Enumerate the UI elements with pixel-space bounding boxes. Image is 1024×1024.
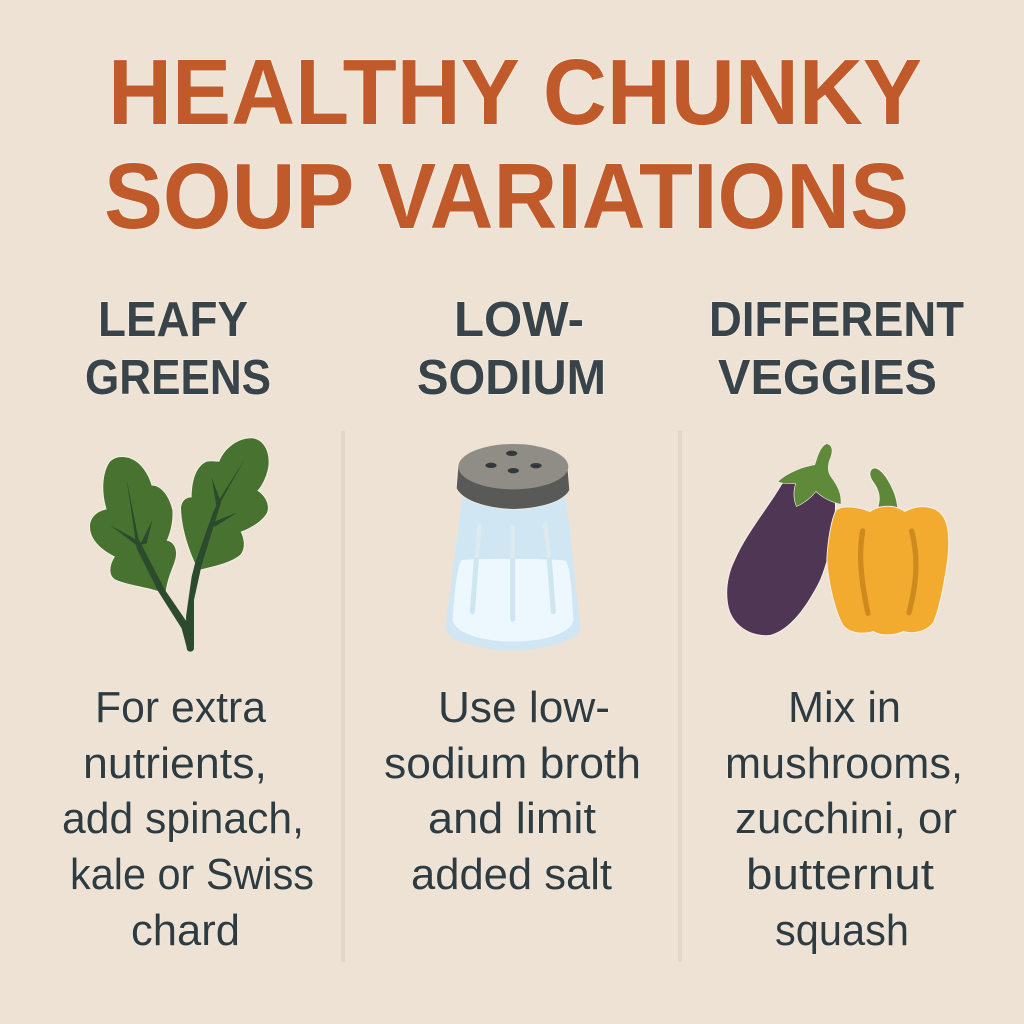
heading: leafy greens	[85, 293, 271, 405]
body text: low-sodium: sodium broth	[384, 740, 641, 788]
icon: leafy greens	[90, 438, 269, 652]
panel: low-sodium	[384, 293, 641, 899]
body text: leafy greens: nutrients,	[83, 740, 267, 788]
heading: different veggies	[709, 293, 964, 405]
body text: low-sodium	[384, 684, 641, 899]
heading: leafy greens: GREENS	[85, 351, 271, 405]
body text: leafy greens: chard	[131, 907, 240, 955]
body text: low-sodium: Use low-	[438, 684, 610, 732]
body text: different veggies	[725, 684, 963, 955]
body text: low-sodium: added salt	[411, 851, 612, 899]
body text: leafy greens: For extra	[95, 684, 267, 732]
heading: low-sodium: LOW-	[454, 293, 584, 347]
body text: low-sodium: and limit	[428, 795, 596, 843]
title: SOUP VARIATIONS	[104, 144, 909, 248]
body text: different veggies: zucchini, or	[735, 795, 957, 843]
body text: leafy greens: kale or Swiss	[70, 851, 314, 899]
body text: different veggies: squash	[775, 907, 909, 955]
body text: different veggies: butternut	[746, 851, 934, 899]
heading: different veggies: DIFFERENT	[709, 293, 964, 347]
title: HEALTHY CHUNKY	[108, 40, 922, 144]
body text: different veggies: mushrooms,	[725, 740, 963, 788]
heading: different veggies: VEGGIES	[718, 351, 937, 405]
heading: low-sodium	[417, 293, 606, 405]
icon: eggplant and bell pepper	[727, 444, 948, 635]
icon: salt shaker	[446, 444, 581, 651]
body text: different veggies: Mix in	[788, 684, 901, 732]
panel: leafy greens	[62, 293, 314, 955]
title	[104, 40, 922, 248]
body text: leafy greens: add spinach,	[62, 795, 304, 843]
body text: leafy greens	[62, 684, 314, 955]
heading: leafy greens: LEAFY	[98, 293, 248, 347]
heading: low-sodium: SODIUM	[417, 351, 606, 405]
panel: different veggies	[709, 293, 964, 955]
